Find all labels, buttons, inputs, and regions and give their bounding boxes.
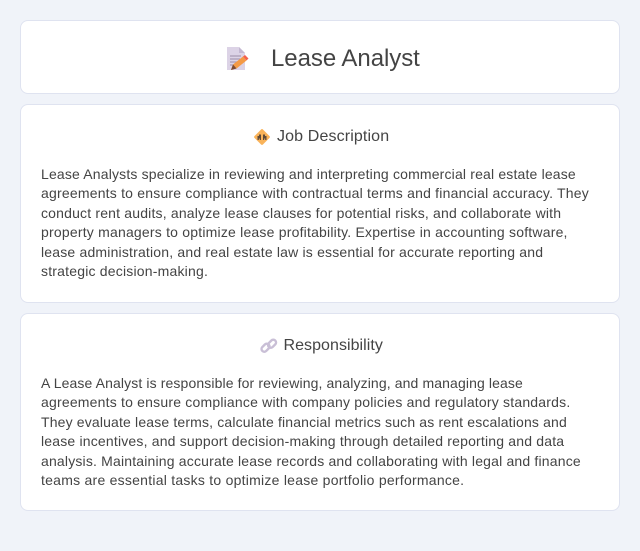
text block: job description <box>41 166 589 279</box>
text block: responsibility: analysis. Maintaining accurate lease records and collaborating with legal and finance <box>41 453 581 469</box>
text block: responsibility: agreements to ensure compliance with company policies and regulatory standards. <box>41 394 570 410</box>
text block: responsibility <box>41 375 581 488</box>
panel: responsibility <box>20 313 620 511</box>
heading: job description: Job Description <box>277 128 389 145</box>
text block: job description: lease administration, and real estate law is essential for accurate reporting and <box>41 244 543 260</box>
icon: chain link <box>260 338 278 353</box>
text block: job description: Lease Analysts specialize in reviewing and interpreting commercial real estate lease <box>41 166 576 182</box>
text block: job description: property managers to optimize lease profitability. Expertise in accounting software, <box>41 224 568 240</box>
text block: responsibility: They evaluate lease terms, calculate financial metrics such as rent escalations and <box>41 414 567 430</box>
text block: responsibility: teams are essential tasks to optimize lease portfolio performance. <box>41 472 464 488</box>
text block: job description: conduct rent audits, analyze lease clauses for potential risks, and collaborate with <box>41 205 561 221</box>
text block: job description: strategic decision-making. <box>41 263 208 279</box>
text block: responsibility: A Lease Analyst is responsible for reviewing, analyzing, and managing lease <box>41 375 523 391</box>
icon: document with pencil <box>227 47 248 70</box>
title: Lease Analyst <box>271 45 420 72</box>
text block: responsibility: lease incentives, and support decision-making through detailed reporting and data <box>41 433 564 449</box>
panel: title card <box>20 20 620 94</box>
text block: job description: agreements to ensure compliance with contractual terms and financial accuracy. They <box>41 185 589 201</box>
panel: job description <box>20 104 620 303</box>
heading: responsibility: Responsibility <box>284 337 383 354</box>
icon: orange diamond <box>254 129 270 145</box>
